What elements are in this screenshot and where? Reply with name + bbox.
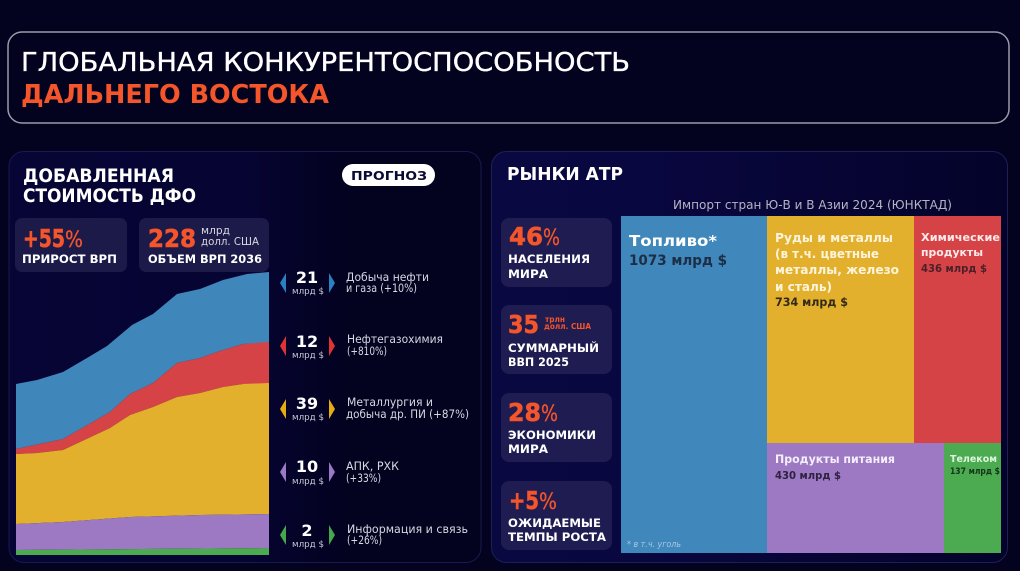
card: expected growth: ОЖИДАЕМЫЕ [508,516,601,530]
title panel [8,32,1009,123]
area: metallurgy [16,383,269,524]
legend: oil and gas: и газа (+10%) [346,281,417,295]
tile: ores and metals: 734 млрд $ [775,295,848,309]
tile: ores and metals: и сталь) [775,279,832,294]
legend: oil and gas: Добыча нефти [346,270,429,284]
legend: petrochemicals: млрд $ [292,351,324,361]
card: population: МИРА [508,267,548,281]
card: world economy: 28 [508,398,541,427]
heading: value added: ДОБАВЛЕННАЯ [23,166,174,187]
legend: petrochemicals [280,332,443,361]
tile: chemicals: Химические [921,231,1000,244]
card: total GDP: СУММАРНЫЙ [508,340,599,355]
legend: agriculture: 10 [296,457,318,476]
treemap caption: Импорт стран Ю-В и В Азии 2024 (ЮНКТАД) [673,198,952,212]
legend: metallurgy: млрд $ [292,413,324,423]
stacked area chart [16,272,269,555]
tile: food [767,443,944,553]
card: GRP growth: % [65,228,83,253]
tile: telecom: Телеком [950,454,997,465]
title line 1: ГЛОБАЛЬНАЯ КОНКУРЕНТОСПОСОБНОСТЬ [21,48,630,78]
tile: food: 430 млрд $ [775,469,841,482]
tile: fuel: * в т.ч. уголь [627,540,681,550]
card: total GDP: трлн [545,315,565,324]
legend: metallurgy: 39 [296,394,318,413]
card: GRP volume 2036: ОБЪЕМ ВРП 2036 [148,252,262,266]
card: world economy: МИРА [508,442,548,456]
card: world economy: ЭКОНОМИКИ [508,428,596,442]
card: GRP growth: ПРИРОСТ ВРП [22,252,117,266]
legend: oil and gas [280,268,429,297]
legend: oil and gas: млрд $ [292,287,324,297]
tile: chemicals [914,216,1001,443]
tile: chemicals: продукты [921,246,983,259]
tile: fuel [621,216,767,553]
card: population: 46 [509,222,543,251]
card: GRP volume 2036: долл. США [201,236,260,248]
tile: telecom [944,443,1001,553]
title line 2: ДАЛЬНЕГО ВОСТОКА [21,80,329,110]
area: telecom [16,548,269,555]
tile: ores and metals: (в т.ч. цветные [775,246,879,261]
tile: chemicals: 436 млрд $ [921,263,987,275]
card: GRP growth: +55 [23,224,65,253]
tile: fuel: 1073 млрд $ [629,253,727,269]
card: world economy: % [541,402,558,427]
legend: agriculture: АПК, РХК [346,459,399,473]
legend: petrochemicals: (+810%) [347,344,387,358]
card: expected growth: +5 [509,486,539,515]
card: GRP volume 2036 [139,218,269,272]
legend: telecom: (+26%) [347,533,382,547]
tile: ores and metals [767,216,914,443]
card: GRP volume 2036: млрд [201,225,230,237]
tile: telecom: 137 млрд $ [950,467,1000,477]
tile: food: Продукты питания [775,452,895,466]
legend: petrochemicals: 12 [296,332,318,351]
area: oil and gas [16,272,269,449]
card: total GDP: ВВП 2025 [508,355,569,369]
legend: oil and gas: 21 [296,268,318,287]
legend: agriculture [280,457,399,487]
tile: fuel: Топливо* [629,232,717,250]
legend: metallurgy: добыча др. ПИ (+87%) [346,407,469,421]
card: expected growth [501,481,612,550]
card: GRP growth [15,218,127,272]
tile: ores and metals: металлы, железо [775,262,899,277]
card: expected growth: ТЕМПЫ РОСТА [508,530,606,544]
legend: telecom [280,521,468,550]
legend: metallurgy: Металлургия и [347,395,433,409]
legend: telecom: млрд $ [292,540,324,550]
legend: agriculture: млрд $ [292,477,324,487]
legend: metallurgy [280,394,469,423]
legend: telecom: 2 [301,521,313,540]
card: population: % [543,226,560,251]
card: total GDP: 35 [508,310,539,339]
panel: APAC markets [492,152,1008,562]
card: expected growth: % [539,490,557,515]
card: total GDP [501,305,612,374]
area: agriculture [16,514,269,550]
card: population [501,218,612,287]
heading: value added [23,166,196,207]
heading: APAC markets: РЫНКИ АТР [507,164,623,185]
badge: forecast [342,164,435,186]
card: population: НАСЕЛЕНИЯ [508,252,590,266]
legend: agriculture: (+33%) [346,471,381,485]
legend: petrochemicals: Нефтегазохимия [347,332,443,346]
panel: value added [9,152,481,562]
heading: value added: СТОИМОСТЬ ДФО [23,186,196,207]
card: world economy [501,393,612,462]
card: total GDP: долл. США [544,322,591,331]
tile: ores and metals: Руды и металлы [775,230,893,245]
area: petrochemicals [16,342,269,454]
card: GRP volume 2036: 228 [148,224,196,253]
treemap [621,216,1001,553]
legend: telecom: Информация и связь [347,522,468,536]
badge: forecast: ПРОГНОЗ [351,168,427,183]
